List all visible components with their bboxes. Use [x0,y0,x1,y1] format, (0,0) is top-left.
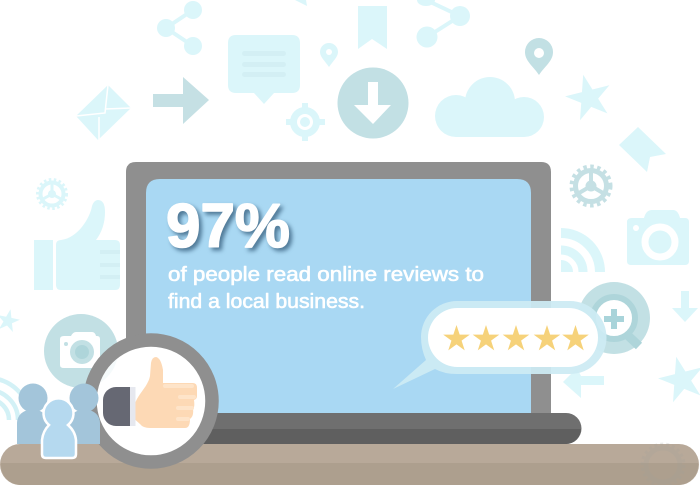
bubble inner [428,308,598,367]
icon: gear left [38,180,66,208]
laptop bezel [126,162,551,414]
magnifier ring [90,340,212,462]
laptop [126,162,582,444]
white cuff [130,387,136,426]
person front [42,398,76,458]
people group [17,384,100,458]
icon: share right [416,0,470,48]
icon: star lower right [654,351,700,404]
icon: down arrow [672,291,698,322]
person left [17,384,48,444]
icon: right arrow [153,77,209,124]
icon: wifi right [561,233,600,272]
icon: gear on table [642,444,684,485]
icon: camera circle [44,314,118,388]
body text: of people read online reviews to [168,264,484,286]
icon: thumbs up outline left [34,200,120,290]
laptop base [180,413,582,444]
hand [136,357,197,428]
icon: top fragment [295,0,307,6]
icon: target [286,103,325,141]
icon: chat bubble [228,35,300,104]
icon: gear right [572,166,610,206]
icon: small pin [320,43,338,67]
bubble outline and tail [393,301,606,389]
five stars [443,325,589,350]
icon: share left [157,1,202,55]
shirt cuff [103,387,130,426]
icon: star left [0,307,22,333]
faint camera through lens [101,360,116,382]
body text: find a local business. [168,291,365,313]
icon: wifi left [0,378,30,420]
body text [168,264,484,313]
magnifier with thumbs up [86,333,219,469]
rating speech bubble [393,301,606,389]
headline 97%: 97% [166,192,290,261]
icon: ribbon [619,127,666,172]
icon: bookmark [358,6,387,49]
icon: large pin [525,38,553,75]
icon: magnifying glass [578,282,650,354]
icon: star upper right [561,69,616,122]
table [0,444,699,485]
icon: camera right [627,210,689,265]
icon: left arrow [563,368,604,398]
person right [69,384,100,444]
icon: cloud [435,77,544,137]
icon: download circle [338,68,408,138]
icon: envelope [76,85,131,140]
laptop screen [146,179,531,413]
